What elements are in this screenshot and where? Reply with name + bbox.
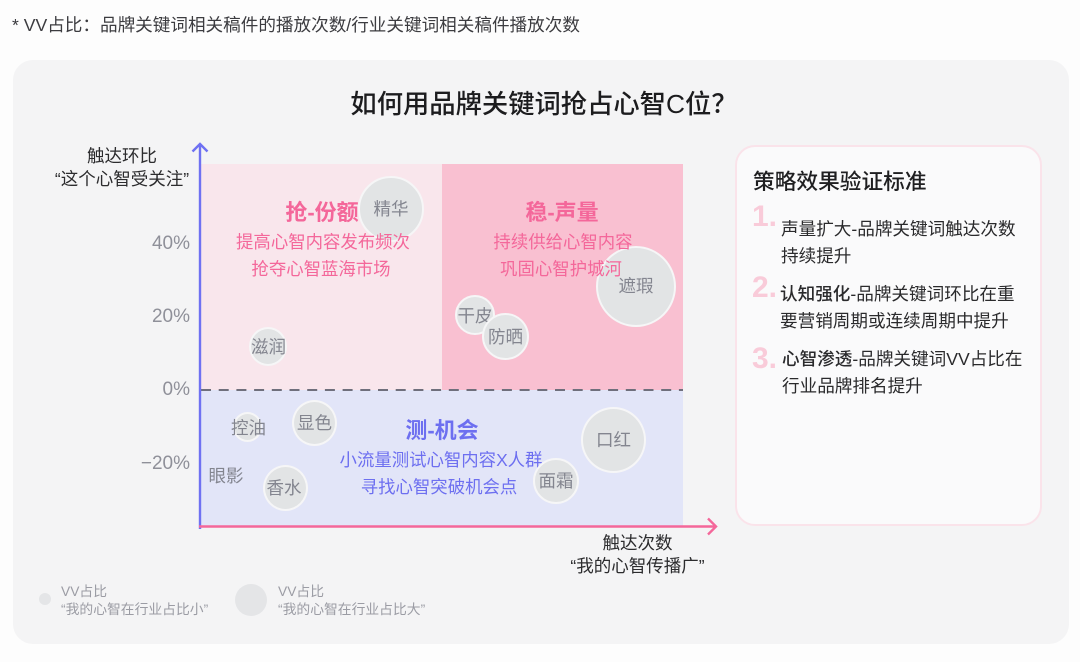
legend: large bubble	[235, 584, 425, 617]
bubble: 干皮: 干皮	[458, 306, 492, 326]
bubble: 控油: 控油	[231, 418, 266, 438]
item 2 text: 要营销周期或连续周期中提升	[780, 311, 1009, 331]
y axis title	[55, 146, 189, 189]
y axis label 0%: 0%	[163, 379, 190, 400]
y axis arrow	[192, 142, 208, 529]
bubble: 香水: 香水	[266, 478, 302, 498]
label: 眼影: 眼影	[208, 466, 244, 486]
bubble: 香水	[263, 465, 308, 511]
number 2: 2.	[752, 271, 777, 304]
quadrant: 稳-声量	[442, 164, 683, 390]
y axis label 40%: 40%	[152, 233, 190, 254]
legend small text: VV占比	[61, 584, 107, 599]
bubble: 防晒: 防晒	[488, 327, 523, 347]
bubble: 显色	[292, 400, 337, 446]
text: 稳-声量 description	[493, 232, 633, 279]
bubble: 口红: 口红	[596, 430, 631, 450]
bubble: 控油	[233, 412, 262, 442]
heading: 抢-份额: 抢-份额	[285, 200, 359, 225]
panel: 策略效果验证标准	[735, 145, 1042, 526]
title: 如何用品牌关键词抢占心智C位？	[350, 89, 738, 119]
number 1: 1.	[752, 200, 777, 233]
y axis label -20%: −20%	[141, 453, 190, 474]
bubble: 遮瑕	[596, 246, 676, 327]
x axis title: “我的心智传播广”	[570, 556, 705, 576]
y axis title: 触达环比	[87, 146, 157, 166]
item 1 text: 声量扩大-品牌关键词触达次数	[781, 219, 1016, 239]
item 2 text: 认知强化-品牌关键词环比在重	[780, 284, 1015, 304]
text: 测-机会 description	[340, 450, 542, 497]
x axis title: 触达次数	[602, 533, 672, 553]
bubble: 防晒	[482, 313, 529, 360]
bubble: 精华: 精华	[374, 199, 408, 219]
bubble: 滋润: 滋润	[251, 337, 286, 357]
x axis title	[570, 533, 705, 576]
item 3 text	[782, 349, 1022, 396]
quadrant: 测-机会	[201, 390, 683, 527]
quadrant: 抢-份额	[201, 164, 442, 390]
text: 抢-份额 description: 抢夺心智蓝海市场	[251, 259, 391, 279]
bubble: 面霜	[533, 458, 579, 504]
x axis arrow	[199, 518, 718, 536]
text: 稳-声量 description: 持续供给心智内容	[493, 232, 633, 252]
legend: small bubble	[39, 584, 208, 617]
text: 抢-份额 description	[236, 232, 410, 279]
legend small text: “我的心智在行业占比小”	[61, 602, 208, 617]
text: 抢-份额 description: 提高心智内容发布频次	[236, 232, 410, 252]
legend small circle	[39, 593, 51, 605]
legend large circle	[235, 584, 267, 616]
legend large text	[278, 584, 425, 617]
y axis label 20%: 20%	[152, 306, 190, 327]
footnote: * VV占比：品牌关键词相关稿件的播放次数/行业关键词相关稿件播放次数	[12, 15, 580, 35]
legend large text: VV占比	[278, 584, 324, 599]
bubble: 遮瑕: 遮瑕	[618, 276, 654, 296]
legend small text	[61, 584, 208, 617]
text: 测-机会 description: 寻找心智突破机会点	[361, 477, 517, 497]
bubble: 精华	[358, 176, 424, 242]
zero line	[201, 389, 683, 391]
item 3 text: 行业品牌排名提升	[782, 376, 923, 396]
text: 稳-声量 description: 巩固心智护城河	[500, 259, 622, 279]
bubble: 干皮	[455, 295, 495, 335]
text: 测-机会 description: 小流量测试心智内容X人群	[340, 450, 542, 470]
bubble: 面霜: 面霜	[538, 471, 574, 491]
bubble: 滋润	[249, 327, 287, 366]
item 2 text	[780, 284, 1015, 331]
item 3 text: 心智渗透-品牌关键词VV占比在	[782, 349, 1022, 369]
y axis title: “这个心智受关注”	[55, 169, 189, 189]
panel heading: 策略效果验证标准	[753, 169, 927, 194]
item 1 text	[781, 219, 1016, 266]
bubble: 显色: 显色	[297, 413, 332, 433]
heading: 测-机会: 测-机会	[405, 418, 479, 443]
legend large text: “我的心智在行业占比大”	[278, 602, 425, 617]
number 3: 3.	[752, 342, 777, 375]
item 1 text: 持续提升	[781, 246, 851, 266]
heading: 稳-声量: 稳-声量	[525, 200, 599, 225]
bubble: 口红	[581, 407, 646, 473]
